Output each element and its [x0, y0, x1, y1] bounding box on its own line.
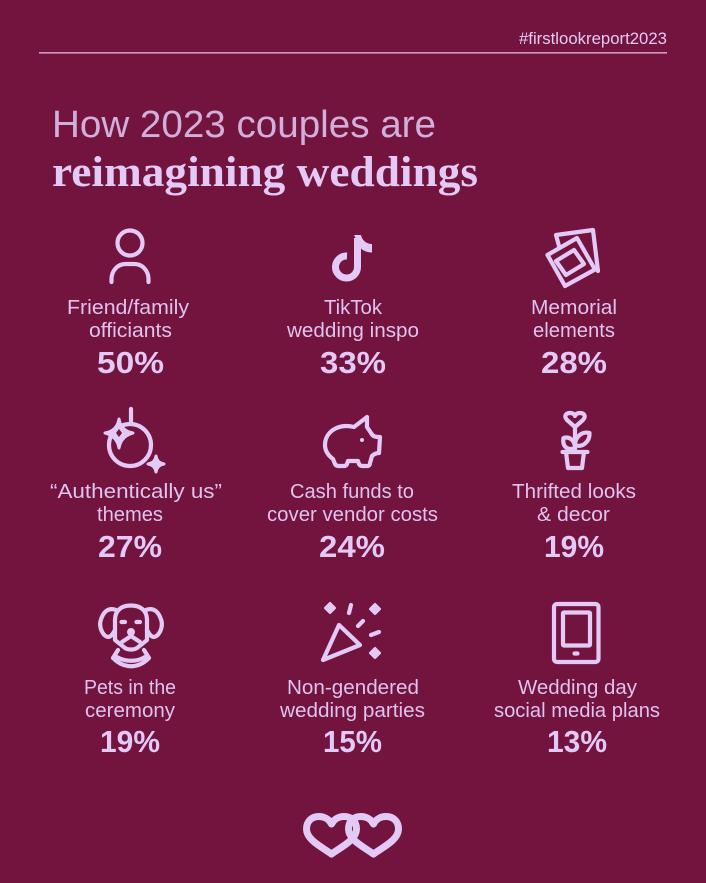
icon: disco ball — [105, 409, 164, 472]
panel: pets in the ceremony — [84, 606, 176, 759]
panel: pets in the ceremony: 19% — [100, 724, 160, 759]
panel: friend/family officiants — [67, 230, 189, 380]
panel: pets in the ceremony: ceremony — [85, 700, 175, 722]
panel: memorial elements: 28% — [541, 345, 607, 380]
title: How 2023 couples are — [52, 104, 436, 146]
panel: authentically us themes: 27% — [98, 529, 162, 564]
panel: authentically us themes: themes — [97, 504, 163, 526]
panel: thrifted looks: & decor — [537, 504, 610, 526]
panel: cash funds: Cash funds to — [290, 481, 414, 503]
panel: cash funds — [267, 417, 438, 564]
icon: tiktok — [335, 235, 372, 278]
panel: friend/family officiants: Friend/family — [67, 297, 189, 319]
panel: memorial elements — [531, 230, 617, 380]
panel: friend/family officiants: officiants — [89, 320, 172, 342]
panel: social media plans: Wedding day — [518, 677, 637, 699]
panel: pets in the ceremony: Pets in the — [84, 677, 176, 699]
panel: tiktok wedding inspo: TikTok — [324, 297, 383, 319]
icon: person — [112, 230, 148, 282]
panel: memorial elements: Memorial — [531, 297, 617, 319]
panel: memorial elements: elements — [533, 320, 615, 342]
icon: heart flower in pot — [562, 413, 590, 468]
panel: tiktok wedding inspo — [286, 235, 419, 380]
panel: tiktok wedding inspo: wedding inspo — [286, 320, 419, 342]
title — [52, 104, 478, 196]
panel: friend/family officiants: 50% — [97, 345, 164, 380]
panel: cash funds: 24% — [319, 529, 385, 564]
hashtag: #firstlookreport2023 — [519, 30, 667, 48]
panel: authentically us themes — [50, 409, 222, 564]
panel: thrifted looks: 19% — [544, 529, 604, 564]
icon: interlocking hearts logo — [306, 816, 398, 854]
panel: social media plans: social media plans — [494, 700, 660, 722]
panel: cash funds: cover vendor costs — [267, 504, 438, 526]
title: reimagining weddings — [52, 149, 478, 196]
panel: tiktok wedding inspo: 33% — [320, 345, 386, 380]
panel: non-gendered wedding parties — [279, 604, 425, 759]
panel: non-gendered wedding parties: Non-gendered — [287, 677, 419, 699]
panel: thrifted looks — [512, 413, 636, 564]
icon: piggy bank — [325, 417, 380, 466]
icon: party popper — [323, 604, 380, 660]
icon: dog — [100, 606, 162, 666]
icon: photos — [548, 230, 598, 286]
panel: non-gendered wedding parties: wedding parties — [279, 700, 425, 722]
panel: social media plans — [494, 604, 660, 759]
panel: social media plans: 13% — [547, 724, 607, 759]
panel: non-gendered wedding parties: 15% — [323, 724, 382, 759]
panel: thrifted looks: Thrifted looks — [512, 481, 636, 503]
icon: tablet — [554, 604, 598, 662]
panel: authentically us themes: “Authentically us” — [50, 481, 222, 503]
